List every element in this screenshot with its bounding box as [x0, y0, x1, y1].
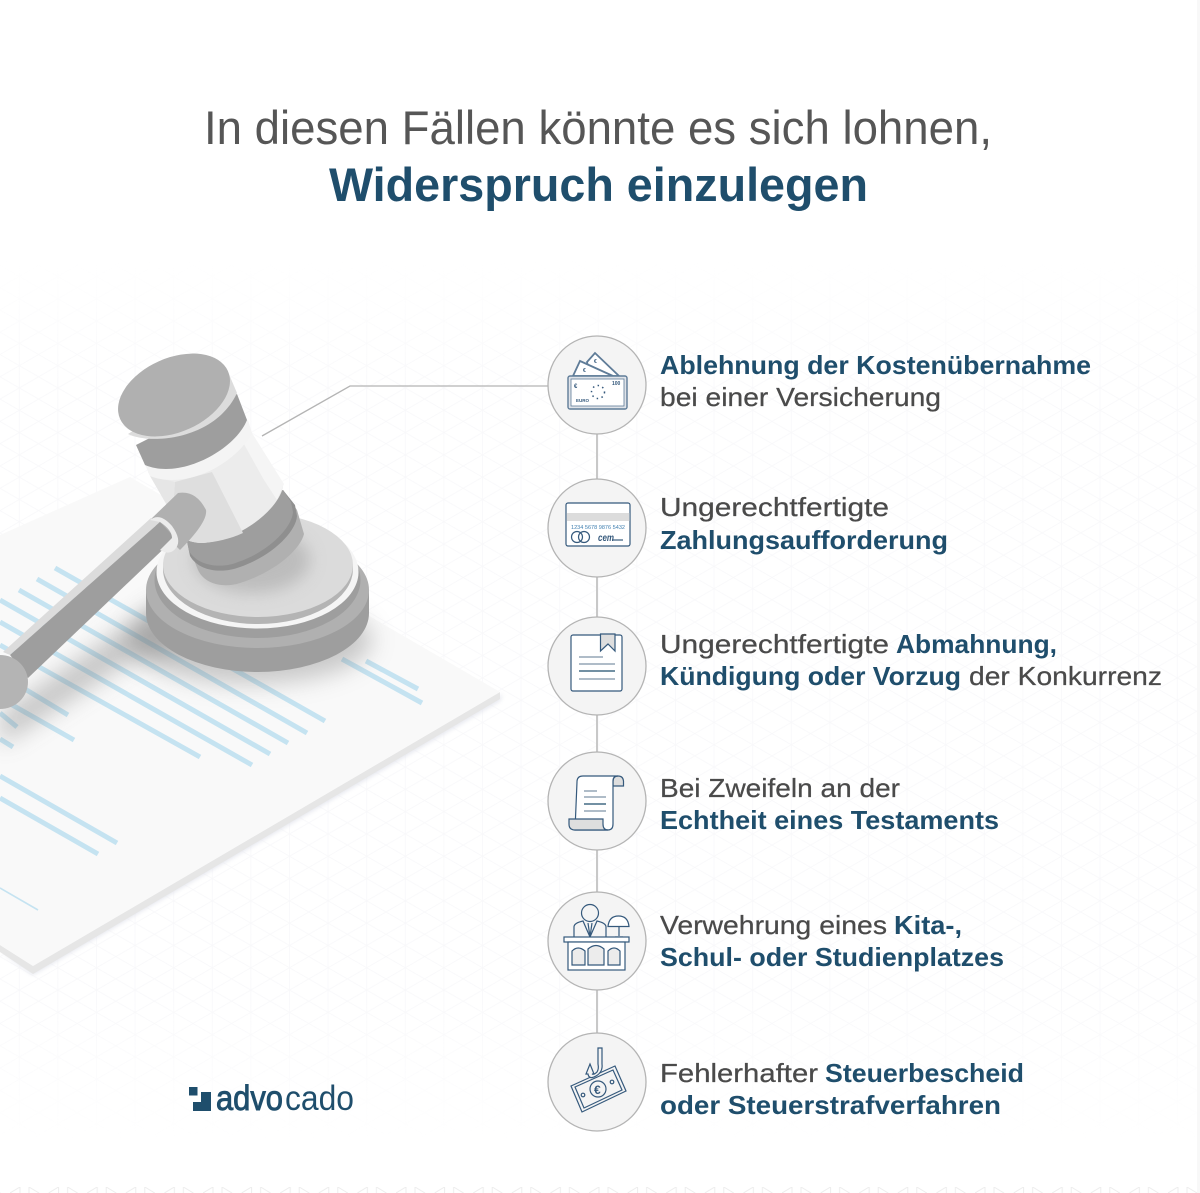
icon circle: document with bookmark — [548, 617, 646, 715]
item 6 text: Fehlerhafter — [660, 1058, 818, 1088]
item 5 text: Verwehrung eines — [660, 910, 887, 940]
icon circle: banknotes: EURO — [576, 398, 590, 403]
document text lines — [0, 568, 422, 910]
icon circle: credit card: cem — [598, 533, 614, 544]
illustration: gavel handle — [0, 493, 206, 709]
item 4 text: Bei Zweifeln an der — [660, 773, 900, 803]
item 1 text: bei einer Versicherung — [660, 382, 941, 412]
item 3: warning letter — [548, 617, 1162, 715]
icon circle: scroll — [548, 752, 646, 850]
item 5 text — [660, 910, 1004, 972]
icon circle: banknote on hook: € — [594, 1083, 601, 1097]
item 5: school place — [548, 892, 1004, 990]
icon circle: banknotes — [548, 336, 646, 434]
illustration: document sheet — [0, 477, 503, 975]
item 3 text: Kündigung oder Vorzug — [660, 661, 961, 691]
title: In diesen Fällen könnte es sich lohnen, — [204, 101, 992, 154]
item 2 text — [660, 492, 948, 555]
item 5 text: Schul- oder Studienplatzes — [660, 942, 1004, 972]
item 1: insurance — [548, 336, 1091, 434]
illustration: gavel shadow — [0, 596, 372, 745]
item 2 text: Zahlungsaufforderung — [660, 525, 948, 555]
item 3 text: der Konkurrenz — [969, 661, 1162, 691]
logo: advocado: advo — [216, 1079, 283, 1118]
item 3 text: Ungerechtfertigte — [660, 629, 889, 659]
icon circle: banknotes: € — [583, 368, 586, 374]
item 3 text: Abmahnung, — [896, 629, 1057, 659]
item 6 text: Steuerbescheid — [825, 1058, 1024, 1088]
item 2 text: Ungerechtfertigte — [660, 492, 889, 522]
item 6 text: oder Steuerstrafverfahren — [660, 1090, 1001, 1120]
illustration: gavel head — [105, 337, 304, 585]
item 4: testament — [548, 752, 999, 850]
illustration: gavel sound block — [146, 513, 369, 672]
title — [204, 101, 992, 211]
leader line to first icon — [262, 386, 548, 436]
item 6 text — [660, 1058, 1024, 1120]
title: Widerspruch einzulegen — [329, 158, 868, 211]
icon circle: banknotes: 100 — [612, 381, 621, 387]
item 5 text: Kita-, — [894, 910, 962, 940]
icon circle: person at desk — [548, 892, 646, 990]
icon circle: credit card — [548, 479, 646, 577]
icon circle: banknotes: € — [574, 384, 578, 390]
item 1 text — [660, 350, 1091, 412]
item 3 text — [660, 629, 1162, 691]
item 4 text: Echtheit eines Testaments — [660, 805, 999, 835]
icon circle: banknote on hook — [548, 1033, 646, 1131]
timeline connector — [596, 430, 598, 1040]
item 4 text — [660, 773, 999, 835]
item 2: payment — [548, 479, 948, 577]
logo: advocado — [189, 1079, 354, 1118]
icon circle: banknotes: € — [594, 359, 597, 365]
item 1 text: Ablehnung der Kostenübernahme — [660, 350, 1091, 380]
logo: advocado: cado — [285, 1079, 354, 1118]
icon circle: credit card: 1234 5678 9876 5432 — [571, 525, 625, 531]
item 6: tax — [548, 1033, 1024, 1131]
